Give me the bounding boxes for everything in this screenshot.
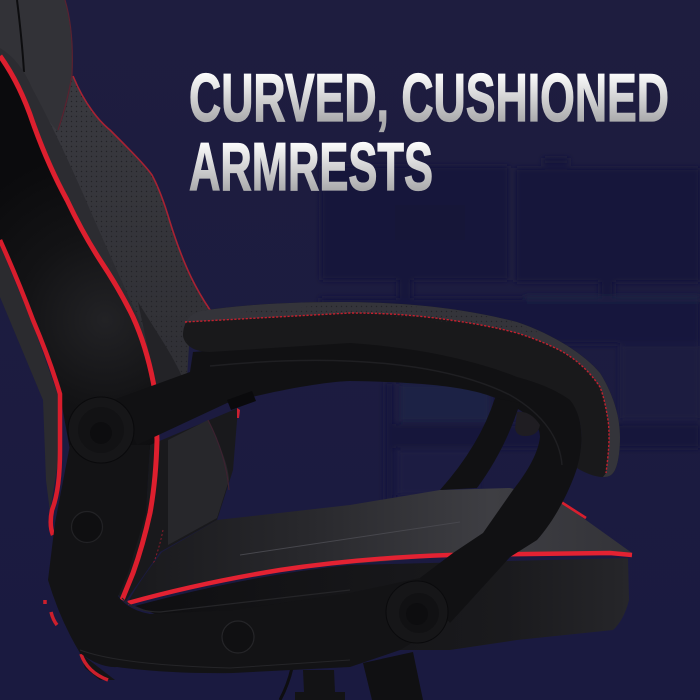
small red tab by arm xyxy=(237,408,240,418)
button lower xyxy=(222,621,254,653)
arm upper frame and curved support xyxy=(113,340,581,623)
red piping outer xyxy=(0,240,60,535)
L-shaped lower frame xyxy=(48,445,450,673)
rear support strut xyxy=(440,398,520,490)
outer textured edge xyxy=(0,245,60,512)
red piping main xyxy=(0,56,157,600)
rear pivot knob xyxy=(68,397,134,463)
blurred background: desk and monitors xyxy=(320,158,700,502)
base and cylinder xyxy=(280,652,423,700)
plastic armrest frame xyxy=(48,340,581,673)
arm pad red stitching xyxy=(185,313,609,473)
cushioned arm pad xyxy=(183,302,620,477)
arm pad top strip xyxy=(186,302,620,477)
perforated back wing xyxy=(40,76,210,410)
seat rear piping xyxy=(558,500,586,518)
front pivot knob xyxy=(386,581,448,643)
rear lower red trim xyxy=(45,600,115,680)
seat front cushion xyxy=(135,558,629,650)
seat cushion xyxy=(128,488,632,650)
monitor right xyxy=(515,168,700,282)
chair backrest xyxy=(0,0,240,602)
clip on arm xyxy=(227,391,256,410)
monitor left xyxy=(321,166,509,280)
seat top surface xyxy=(128,488,632,602)
seat red piping xyxy=(128,553,632,603)
title xyxy=(189,60,669,205)
textured grey strip xyxy=(0,48,190,410)
lumbar panel xyxy=(118,408,238,602)
black bolster xyxy=(0,58,156,450)
arm pad body xyxy=(183,302,620,477)
headrest panel xyxy=(0,0,72,132)
strut bolt xyxy=(515,412,540,436)
button upper xyxy=(72,512,102,542)
title line 2: ARMRESTS xyxy=(189,129,433,205)
